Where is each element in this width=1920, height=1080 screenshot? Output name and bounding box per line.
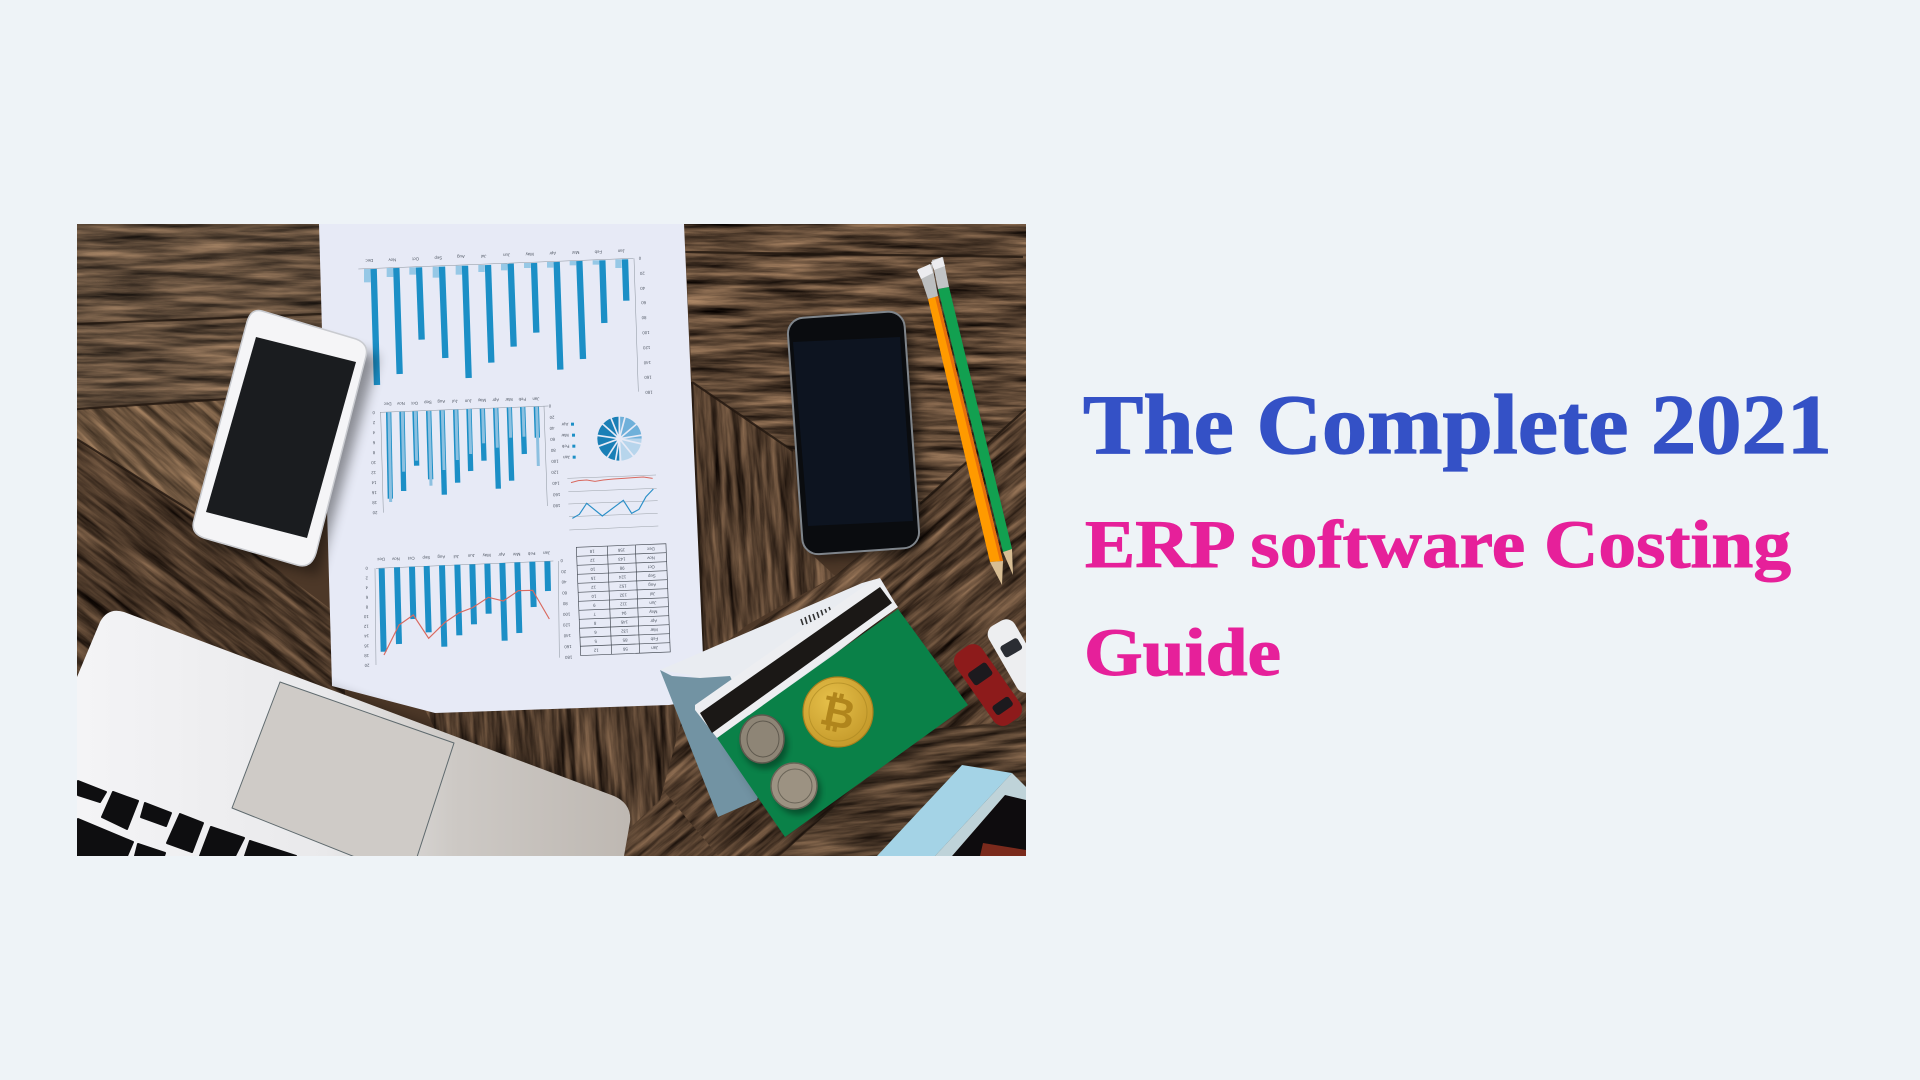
bottom bar and line chart: 80 xyxy=(562,601,568,606)
top bar chart xyxy=(358,248,653,395)
top bar chart: Apr xyxy=(549,251,556,256)
toy cars xyxy=(954,619,1026,726)
bottom bar and line chart: Feb xyxy=(527,551,535,556)
top bar chart: Mar xyxy=(571,250,579,255)
bottom bar and line chart: Oct xyxy=(407,556,415,561)
middle bar chart: 10 xyxy=(371,460,376,465)
pencils xyxy=(917,257,1018,585)
bottom bar and line chart: Nov xyxy=(391,556,400,562)
middle bar chart: 14 xyxy=(371,480,376,485)
data table: 6 xyxy=(594,630,597,635)
middle bar chart: 6 xyxy=(372,440,375,445)
infographic canvas xyxy=(77,224,1828,856)
data table: 7 xyxy=(593,612,596,617)
pie legend xyxy=(561,422,576,460)
middle bar chart: 180 xyxy=(552,503,560,508)
bottom bar and line chart: 6 xyxy=(365,595,368,600)
pie chart xyxy=(597,415,643,462)
data table: May xyxy=(648,609,658,615)
middle bar chart: 2 xyxy=(372,420,375,425)
keyboard keys xyxy=(78,781,296,856)
data table: Feb xyxy=(650,636,658,642)
data table: Apr xyxy=(650,618,657,624)
middle bar chart: Dec xyxy=(383,401,392,407)
data table: 12 xyxy=(591,585,596,590)
middle bar chart: Feb xyxy=(518,397,526,402)
top bar chart: 120 xyxy=(642,345,650,350)
middle bar chart: 18 xyxy=(372,500,377,505)
envelope xyxy=(660,578,897,817)
red car xyxy=(954,644,1022,726)
middle bar chart: 12 xyxy=(371,470,376,475)
data table: 132 xyxy=(619,593,627,598)
data table: 12 xyxy=(589,558,595,563)
data table: 124 xyxy=(618,575,626,580)
data table: Nov xyxy=(646,555,655,561)
top bar chart: May xyxy=(525,252,534,257)
green bank card xyxy=(695,580,975,845)
bottom bar and line chart: 60 xyxy=(562,590,567,596)
bottom bar and line chart: 18 xyxy=(364,653,369,658)
paper report xyxy=(319,224,703,713)
middle bar chart: 120 xyxy=(551,470,559,475)
title xyxy=(1083,378,1832,690)
bottom bar and line chart: 120 xyxy=(562,622,570,628)
middle bar chart: 80 xyxy=(550,448,556,453)
pie legend: Jan xyxy=(563,455,570,460)
top bar chart: 180 xyxy=(645,390,653,395)
data table: Sep xyxy=(647,573,656,579)
top bar chart: 80 xyxy=(641,315,646,320)
data table: 132 xyxy=(620,628,628,634)
data table: 156 xyxy=(617,548,625,553)
bottom bar and line chart: 20 xyxy=(364,663,369,668)
pie legend: Mar xyxy=(561,433,569,438)
bottom bar and line chart: 100 xyxy=(562,612,570,617)
gold coin: ₿ xyxy=(816,685,860,740)
green pencil xyxy=(931,257,1013,575)
white smartphone xyxy=(193,310,378,575)
top bar chart: Oct xyxy=(411,256,419,262)
middle bar chart: May xyxy=(477,398,486,403)
middle bar chart: Apr xyxy=(492,397,499,403)
data table: 12 xyxy=(593,648,599,653)
subheading line: Guide: Guide xyxy=(1084,614,1281,690)
barcode xyxy=(801,607,831,625)
heading line: The Complete 2021: The Complete 2021 xyxy=(1083,378,1832,472)
top bar chart: 20 xyxy=(639,271,645,276)
data table: 145 xyxy=(620,619,628,625)
data table: 15 xyxy=(590,576,596,581)
bottom bar and line chart: 2 xyxy=(365,575,368,581)
top bar chart: 100 xyxy=(642,330,650,335)
top bar chart: Feb xyxy=(594,249,602,255)
data table: 94 xyxy=(621,611,627,616)
laptop xyxy=(77,611,632,857)
middle bar chart: Sep xyxy=(423,400,432,405)
top bar chart: 40 xyxy=(640,286,645,291)
data table: 98 xyxy=(619,566,625,571)
top bar chart: 0 xyxy=(638,256,641,261)
middle bar chart: 0 xyxy=(548,403,551,409)
data table: Mar xyxy=(650,627,658,633)
middle bar chart xyxy=(371,396,560,515)
top bar chart: 60 xyxy=(641,300,646,305)
pie legend: Apr xyxy=(561,422,568,427)
top bar chart: Nov xyxy=(388,257,396,263)
middle bar chart: Oct xyxy=(410,401,418,406)
data table: 9 xyxy=(592,603,596,608)
middle bar chart: Jun xyxy=(464,398,472,404)
bottom bar and line chart: 10 xyxy=(363,614,369,619)
data table: 112 xyxy=(620,602,627,607)
middle bar chart: Mar xyxy=(505,397,513,402)
charts on the paper xyxy=(358,248,670,668)
bottom bar and line chart: 160 xyxy=(564,644,572,649)
top bar chart: 160 xyxy=(644,375,652,380)
bottom bar and line chart: 180 xyxy=(564,655,572,660)
data table: 85 xyxy=(622,638,628,643)
bottom bar and line chart: Jan xyxy=(543,550,550,556)
middle bar chart: Aug xyxy=(437,399,445,404)
middle bar chart: 40 xyxy=(549,426,554,431)
orange pencil xyxy=(917,264,1003,585)
data table: 10 xyxy=(591,594,596,599)
bottom bar and line chart: 14 xyxy=(364,633,369,639)
top bar chart: Jan xyxy=(617,248,625,254)
middle bar chart: 0 xyxy=(372,410,375,415)
top bar chart: 140 xyxy=(643,360,651,365)
bottom bar and line chart: 0 xyxy=(365,566,368,571)
middle bar chart: 20 xyxy=(549,415,554,420)
data table: 143 xyxy=(618,557,626,562)
white car xyxy=(988,619,1026,693)
data table: 56 xyxy=(622,647,628,652)
data table: Aug xyxy=(648,582,656,588)
middle bar chart: 16 xyxy=(371,490,377,495)
middle bar chart: Nov xyxy=(396,401,405,406)
data table: Dec xyxy=(646,546,655,552)
line chart xyxy=(567,475,658,530)
data table: Jan xyxy=(651,645,658,651)
data table: Oct xyxy=(647,564,655,570)
bottom bar and line chart: 12 xyxy=(363,624,369,629)
photo: desk with financial report xyxy=(77,224,1048,857)
subheading line: ERP software Costing: ERP software Costing xyxy=(1085,506,1791,582)
bottom bar and line chart: Dec xyxy=(376,557,385,562)
bottom bar and line chart: 140 xyxy=(563,633,571,638)
top bar chart: Sep xyxy=(434,255,442,261)
bottom bar and line chart: 40 xyxy=(561,579,566,585)
light blue box xyxy=(877,765,1026,856)
bottom bar and line chart xyxy=(363,550,572,668)
data table: Jun xyxy=(649,600,657,606)
data table: 18 xyxy=(589,549,595,554)
pie legend: Feb xyxy=(561,444,569,449)
top bar chart: Dec xyxy=(365,258,373,263)
wood desk surface xyxy=(77,224,1026,856)
middle bar chart: 20 xyxy=(372,510,377,515)
black smartphone xyxy=(787,311,925,560)
data table: 5 xyxy=(594,639,597,644)
bottom bar and line chart: 16 xyxy=(364,643,369,649)
top bar chart: Jul xyxy=(481,254,487,259)
bottom bar and line chart: 0 xyxy=(560,558,563,563)
bottom bar and line chart: Sep xyxy=(422,555,430,560)
bottom bar and line chart: Aug xyxy=(437,554,445,560)
data table: 10 xyxy=(590,567,595,572)
bottom bar and line chart: Mar xyxy=(512,552,520,557)
bottom bar and line chart: Jun xyxy=(467,553,475,558)
bottom bar and line chart: Jul xyxy=(453,554,459,559)
data table: Jul xyxy=(650,591,655,597)
bottom bar and line chart: 20 xyxy=(561,569,566,574)
middle bar chart: 100 xyxy=(551,459,559,464)
middle bar chart: 60 xyxy=(550,437,555,442)
bottom bar and line chart: Apr xyxy=(498,552,505,557)
data table: 8 xyxy=(593,621,596,626)
top bar chart: Jun xyxy=(503,252,510,258)
middle bar chart: Jul xyxy=(452,399,458,404)
silver coins xyxy=(740,715,821,815)
data table: 152 xyxy=(619,584,627,589)
data table xyxy=(576,544,670,656)
middle bar chart: 160 xyxy=(552,492,560,497)
middle bar chart: 8 xyxy=(372,450,375,455)
middle bar chart: 4 xyxy=(372,430,375,435)
bottom bar and line chart: 8 xyxy=(365,604,368,610)
top bar chart: Aug xyxy=(456,254,465,259)
bottom bar and line chart: 4 xyxy=(365,585,368,590)
trackpad xyxy=(232,682,454,857)
middle bar chart: 140 xyxy=(552,481,560,486)
gold coin xyxy=(803,677,873,747)
middle bar chart: Jan xyxy=(532,396,540,402)
bottom bar and line chart: May xyxy=(482,553,491,558)
